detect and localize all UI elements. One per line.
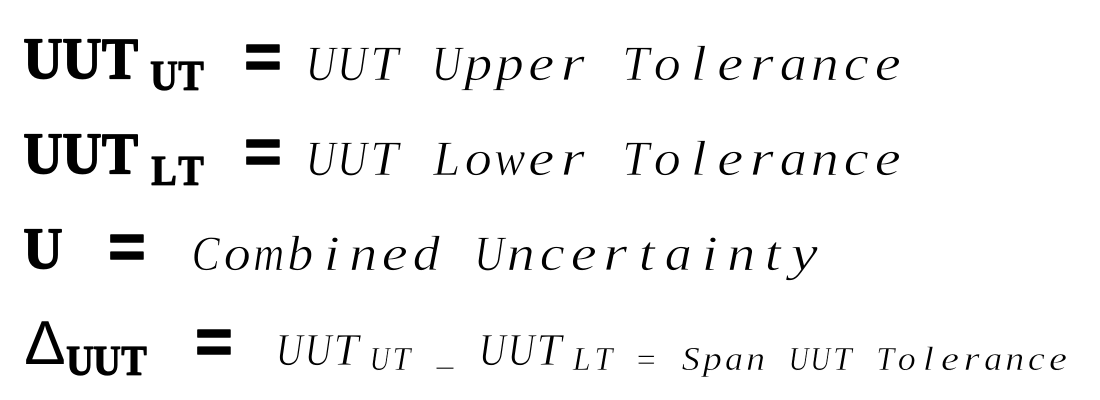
formula: UUT LT: T xyxy=(536,324,565,375)
description: UUT Lower Tolerance: l xyxy=(691,130,707,186)
description: Combined Uncertainty: n xyxy=(349,225,377,281)
description: UUT Upper Tolerance: n xyxy=(811,35,839,91)
description: UUT Upper Tolerance: c xyxy=(844,35,869,91)
description: Combined Uncertainty: i xyxy=(324,225,340,281)
subscript: LT: LT xyxy=(151,147,204,194)
description: Combined Uncertainty: U xyxy=(474,225,507,281)
description: Combined Uncertainty: t xyxy=(639,225,656,281)
description: Combined Uncertainty: t xyxy=(765,225,782,281)
description: Combined Uncertainty: d xyxy=(413,225,441,281)
description: Span UUT Tolerance: T xyxy=(876,341,896,378)
description: Span UUT Tolerance: p xyxy=(701,341,722,378)
equals sign: = xyxy=(244,26,282,98)
description: Combined Uncertainty: e xyxy=(571,225,597,281)
description: Combined Uncertainty: i xyxy=(702,225,718,281)
description: Span UUT Tolerance: e xyxy=(941,341,959,378)
row: UUT upper tolerance definition xyxy=(24,26,901,99)
description: UUT Upper Tolerance: U xyxy=(432,35,464,91)
description: Combined Uncertainty: n xyxy=(507,225,535,281)
formula: UUT LT: U xyxy=(508,324,537,375)
equals sign: = xyxy=(195,311,233,383)
description: UUT Lower Tolerance: U xyxy=(306,130,338,186)
description: Combined Uncertainty: b xyxy=(287,225,313,281)
subscript: UUT: UUT xyxy=(66,337,147,384)
description: Span UUT Tolerance: T xyxy=(833,341,854,378)
row: span UUT tolerance definition xyxy=(24,309,1067,384)
description: Span UUT Tolerance: a xyxy=(984,341,1002,378)
row: UUT lower tolerance definition xyxy=(24,121,901,194)
description: UUT Upper Tolerance: r xyxy=(750,35,774,91)
description: UUT Upper Tolerance: e xyxy=(528,35,554,91)
description: UUT Upper Tolerance: p xyxy=(461,35,492,91)
description: UUT Upper Tolerance: e xyxy=(717,35,743,91)
description: Span UUT Tolerance: l xyxy=(923,341,934,378)
equals sign: = xyxy=(244,121,282,193)
description: Span UUT Tolerance: n xyxy=(746,341,765,378)
formula subscript: UT: T xyxy=(392,341,412,378)
formula subscript: LT: L xyxy=(572,341,591,378)
symbol: delta: Δ xyxy=(24,309,66,378)
description: Combined Uncertainty: C xyxy=(192,225,220,281)
formula subscript: LT: T xyxy=(594,341,614,378)
description: Span UUT Tolerance: U xyxy=(810,341,832,378)
description: UUT Lower Tolerance: e xyxy=(875,130,901,186)
description: UUT Upper Tolerance: U xyxy=(337,35,370,91)
subscript: UT: UT xyxy=(150,52,204,99)
formula: UUT UT: U xyxy=(305,324,334,375)
description: Combined Uncertainty: e xyxy=(382,225,408,281)
description: UUT Upper Tolerance: r xyxy=(561,35,585,91)
formula: UUT UT: U xyxy=(276,324,305,375)
symbol: UUT LT: UUT xyxy=(24,122,138,186)
description: Combined Uncertainty: o xyxy=(224,225,251,281)
description: UUT Upper Tolerance: p xyxy=(492,35,524,91)
description: UUT Lower Tolerance: T xyxy=(622,130,652,186)
description: UUT Lower Tolerance: c xyxy=(844,130,869,186)
description: UUT Upper Tolerance: a xyxy=(780,35,807,91)
description: Span UUT Tolerance: r xyxy=(964,341,981,378)
description: Span UUT Tolerance: e xyxy=(1049,341,1067,378)
description: UUT Lower Tolerance: r xyxy=(750,130,774,186)
description: Combined Uncertainty: a xyxy=(665,225,692,281)
description: UUT Lower Tolerance: r xyxy=(561,130,585,186)
description: UUT Lower Tolerance: T xyxy=(370,130,401,186)
minus sign: – xyxy=(436,347,454,384)
description: Combined Uncertainty: c xyxy=(540,225,565,281)
symbol: U: U xyxy=(24,217,62,281)
description: UUT Lower Tolerance: U xyxy=(337,130,370,186)
description: UUT Lower Tolerance: w xyxy=(494,130,525,186)
description: Combined Uncertainty: r xyxy=(603,225,628,281)
description: UUT Lower Tolerance: o xyxy=(654,130,681,186)
description: Combined Uncertainty: n xyxy=(727,225,755,281)
description: Span UUT Tolerance: c xyxy=(1028,341,1045,378)
row: combined uncertainty definition xyxy=(24,216,819,288)
description: UUT Lower Tolerance: e xyxy=(717,130,743,186)
formula: UUT UT: T xyxy=(334,324,362,375)
equals sign: = xyxy=(108,216,146,288)
description: Combined Uncertainty: m xyxy=(253,225,284,281)
description: UUT Upper Tolerance: e xyxy=(875,35,901,91)
description: UUT Upper Tolerance: U xyxy=(306,35,338,91)
description: UUT Lower Tolerance: o xyxy=(465,130,492,186)
description: Span UUT Tolerance: S xyxy=(682,341,700,378)
symbol: UUT UT: UUT xyxy=(24,27,138,91)
description: Combined Uncertainty: y xyxy=(785,225,819,281)
description: Span UUT Tolerance: n xyxy=(1005,341,1024,378)
formula subscript: UT: U xyxy=(370,341,392,378)
formula: UUT LT: U xyxy=(479,324,508,375)
description: UUT Lower Tolerance: L xyxy=(432,130,460,186)
description: UUT Upper Tolerance: T xyxy=(370,35,401,91)
description: UUT Upper Tolerance: o xyxy=(654,35,681,91)
description: UUT Lower Tolerance: n xyxy=(811,130,839,186)
description: Span UUT Tolerance: o xyxy=(898,341,916,378)
description: UUT Upper Tolerance: l xyxy=(691,35,707,91)
description: UUT Upper Tolerance: T xyxy=(622,35,652,91)
description: Span UUT Tolerance: a xyxy=(725,341,743,378)
equals sign in formula: = xyxy=(635,342,657,379)
description: UUT Lower Tolerance: e xyxy=(528,130,554,186)
description: UUT Lower Tolerance: a xyxy=(780,130,807,186)
description: Span UUT Tolerance: U xyxy=(789,341,811,378)
